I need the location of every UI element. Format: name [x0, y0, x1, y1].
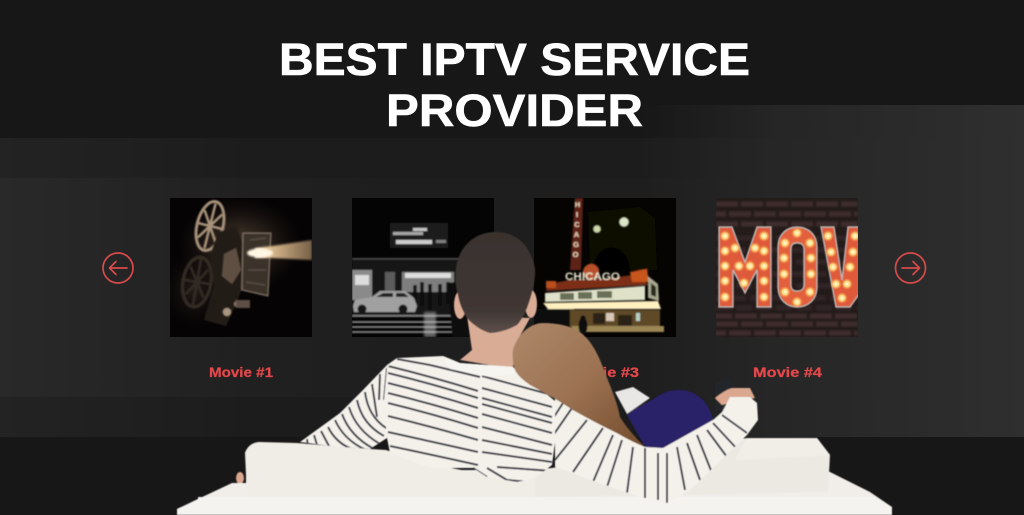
sofa seat	[177, 470, 892, 515]
movie image 3: Chicago theatre	[534, 198, 676, 337]
arrow: next	[896, 253, 926, 283]
projector body	[204, 226, 246, 326]
vertical sign: G	[573, 240, 579, 249]
couple on sofa	[177, 232, 892, 515]
letter V	[821, 227, 862, 307]
lower film reel	[179, 255, 215, 309]
woman's hair	[513, 323, 645, 447]
vertical sign: A	[574, 230, 580, 239]
movie image 1: film projector	[163, 197, 312, 337]
vertical sign: I	[576, 210, 578, 219]
man's head	[455, 232, 535, 333]
movie labels: Movie #1	[209, 364, 273, 380]
title: BEST IPTV SERVICE	[279, 34, 750, 85]
man's left arm	[300, 358, 405, 450]
remote and hand	[715, 377, 755, 412]
vertical sign: H	[575, 200, 580, 209]
title	[279, 34, 750, 136]
vertical sign: O	[573, 250, 579, 259]
movie labels	[209, 364, 822, 380]
man's right arm	[537, 397, 758, 503]
sofa front edge	[177, 497, 892, 515]
marquee bulbs	[719, 227, 861, 308]
billboard	[390, 223, 448, 248]
silhouette beside head	[448, 282, 469, 337]
vertical sign: C	[574, 220, 580, 229]
woman's knee	[615, 387, 713, 448]
projector housing	[242, 233, 271, 296]
storefronts	[352, 260, 457, 316]
vertical sign	[570, 198, 583, 270]
letter M	[719, 227, 771, 307]
man's neck and ears	[454, 290, 537, 369]
movie labels: Movie #2	[391, 364, 455, 380]
arrow: previous	[103, 253, 133, 283]
man's hand on sofa	[236, 472, 244, 484]
sofa left cushion	[245, 442, 536, 497]
projector light beam	[247, 240, 312, 260]
title: PROVIDER	[386, 85, 643, 136]
letter O	[778, 227, 817, 307]
brick wall	[704, 204, 858, 333]
car	[353, 291, 417, 314]
movie labels: Movie #4	[753, 364, 822, 380]
man's shirt body	[384, 356, 560, 482]
movie image 4: marquee letters on brick	[716, 198, 858, 337]
crosswalk	[352, 316, 465, 332]
lobby	[534, 309, 664, 335]
sofa right cushion	[535, 438, 830, 497]
top film reel	[194, 199, 226, 253]
movie image 2: city street	[352, 198, 494, 337]
movie labels: Movie #3	[570, 364, 639, 380]
marquee: CHICAGO	[565, 271, 620, 283]
